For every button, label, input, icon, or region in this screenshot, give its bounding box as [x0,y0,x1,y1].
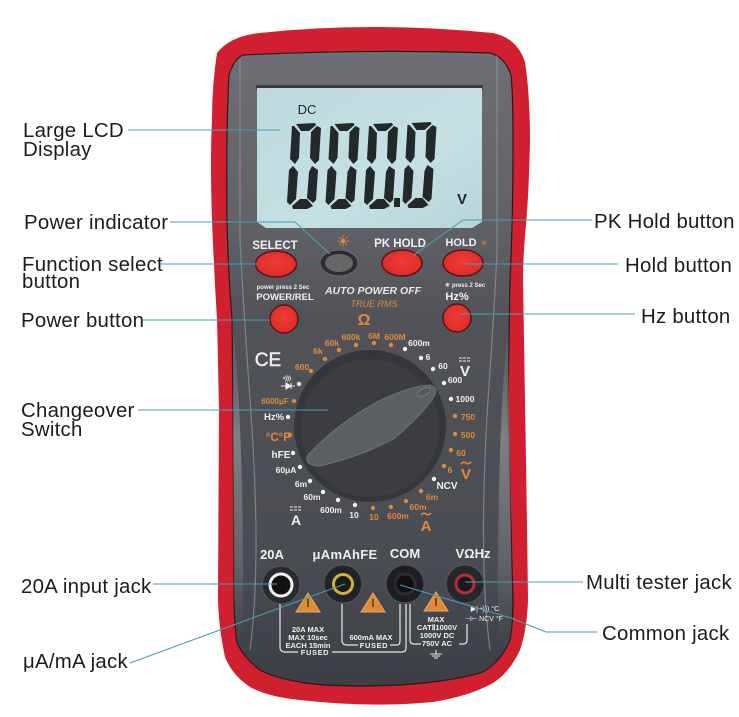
diode and NCV symbols: ⊣⊢ NCV °F [465,615,503,623]
resistance ranges: 6k [313,346,323,356]
continuity and diode position [281,376,301,389]
label: Large LCD Display: Display [23,139,92,161]
uA mA hFE jack [313,547,377,603]
LCD display [256,85,483,228]
power indicator lamp [320,234,358,276]
CE mark: CE [255,350,281,371]
label: Function select button: Function select [22,254,163,276]
label: Multi tester jack: Multi tester jack [586,572,732,594]
rotary selector knob [294,350,446,502]
AC volt symbol: V [461,466,471,483]
uA mA hFE jack: μAmAhFE [313,547,377,562]
DC volt ranges: 60 [438,361,448,371]
NCV position [432,477,458,492]
AC current symbol: A [421,518,432,535]
resistance ranges: 60k [325,338,339,348]
ohm symbol: Ω [358,312,371,329]
fuse and rating notes: CATⅡ1000V [417,623,457,632]
AC current ranges: 600m [387,511,409,521]
fuse and rating notes: MAX 10sec [288,633,328,642]
resistance ranges [295,331,406,373]
auto power off notice: AUTO POWER OFF [324,285,422,297]
meter body [211,27,530,705]
DC current ranges: 60μA [276,465,296,475]
DC current ranges [272,450,359,520]
warning triangles [296,592,448,612]
Hz button [443,282,486,332]
label: Hz button: Hz button [641,306,731,328]
fuse and rating notes: FUSED [360,641,388,650]
DC volt symbol: V [460,363,470,380]
label: uA/mA jack: μA/mA jack [23,651,128,673]
DC volt ranges: 600 [448,375,462,385]
DC current symbol: A [291,512,301,528]
V ohm Hz jack: VΩHz [456,546,491,561]
fuse and rating notes: FUSED [301,648,329,657]
DC current ranges: 10 [349,510,359,520]
AC volt ranges: 6 [448,465,453,475]
20A rating note: 20A MAX [292,625,324,634]
DC current ranges: hFE [272,450,291,461]
continuity and diode position: •))) [283,376,291,382]
Hz button: ☀ press 2 Sec [445,282,486,289]
DC current ranges: 60m [303,492,321,502]
dark grey front panel [227,51,513,686]
DC volt ranges [403,338,475,404]
AC current ranges: 60m [409,502,427,512]
DC current ranges: 6m [295,479,308,489]
POWER/REL button: POWER/REL [256,292,314,303]
HOLD button: HOLD [445,237,477,249]
label: PK Hold button: PK Hold button [594,211,735,233]
fuse and rating notes: 750V AC [422,639,453,648]
capacitance position: 6000μF [261,397,289,406]
NCV position: NCV [436,481,458,492]
Hz button: Hz% [445,291,469,303]
LCD reading 000.0 [287,122,436,209]
POWER/REL button: power press 2 Sec [257,285,310,291]
V ohm Hz jack [446,546,491,603]
rotary dial scale [261,312,475,535]
AC current ranges: 6m [426,492,439,502]
DC current ranges: 600m [320,505,342,515]
DC volt symbol [459,358,471,380]
HOLD button: ☀ [480,238,488,248]
resistance ranges: 600k [342,332,361,342]
AC volt ranges: 60 [456,448,466,458]
AC volt ranges [442,412,475,475]
right side highlight [498,330,512,640]
true RMS label: TRUE RMS [350,299,398,309]
DC volt ranges: 1000 [456,394,475,404]
label: Common jack: Common jack [602,623,730,645]
LCD unit V: V [457,191,467,208]
DC current symbol [290,507,302,528]
label: Power button: Power button [21,310,144,332]
control buttons [252,234,488,333]
fuse and rating notes: ▶| •))) °C [471,605,499,613]
AC current ranges [369,489,439,522]
DC volt ranges: 6 [426,352,431,362]
temperature position: °C°F [266,432,290,444]
Hz position: Hz% [264,412,285,423]
resistance ranges: 600M [384,332,406,342]
voltage rating note: MAX [428,615,444,624]
POWER/REL button [256,285,314,333]
COM jack: COM [390,546,420,561]
power indicator lamp: ☀ [336,234,350,251]
fuse and rating notes: EACH 15min [285,641,331,650]
PK HOLD button [374,238,426,276]
label: Function select button: button [22,271,80,293]
600mA rating note: 600mA MAX [349,633,393,642]
knob pointer [307,385,436,466]
AC volt ranges: 750 [461,412,475,422]
input jacks [260,546,491,604]
PK HOLD button: PK HOLD [374,238,426,250]
left side highlight [233,330,243,640]
fuse and rating notes: 1000V DC [420,631,455,640]
AC volt ranges: 500 [461,430,475,440]
fuse and rating notes [280,604,503,658]
COM jack [386,546,424,603]
HOLD button [443,237,488,276]
DC volt ranges: 600m [408,338,430,348]
label: Large LCD Display: Large LCD [23,120,124,142]
20A jack: 20A [260,547,285,562]
leader lines [128,130,635,663]
label: 20A input jack: 20A input jack [21,576,152,598]
resistance ranges: 6M [368,331,380,341]
SELECT button [252,240,298,277]
resistance ranges: 600 [295,362,309,372]
label: Changeover Switch: Switch [21,419,83,441]
LCD DC indicator: DC [298,102,316,117]
SELECT button: SELECT [252,240,298,252]
label: Power indicator: Power indicator [24,212,168,234]
red rubber case [211,27,530,705]
20A jack [260,547,300,604]
label: Changeover Switch: Changeover [21,400,135,422]
AC current ranges: 10 [369,512,379,522]
label: Hold button: Hold button [625,255,732,277]
